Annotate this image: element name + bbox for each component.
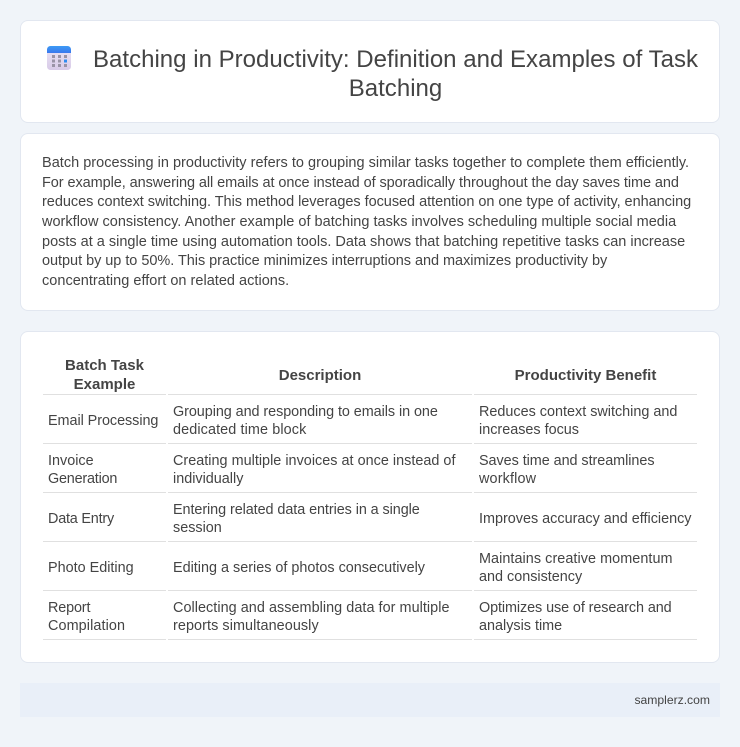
title: Batching: [349, 75, 442, 102]
footer bar: [20, 683, 720, 717]
row: email processing: increases focus: [479, 422, 579, 438]
row: report compilation: Optimizes use of research and: [479, 600, 672, 616]
title: Batching in Productivity: Definition and Examples of Task: [93, 46, 698, 73]
table header: Example: [74, 376, 135, 393]
intro text panel: [20, 133, 720, 311]
row: email processing: Grouping and responding to emails in one: [173, 404, 438, 420]
table header: Batch Task: [65, 357, 144, 374]
intro text panel: workflow consistency. Another example of batching tasks involves scheduling multiple social media: [42, 214, 676, 230]
row: email processing: Reduces context switching and: [479, 404, 677, 420]
icon: calendar: [47, 46, 71, 70]
row: photo editing: [48, 551, 673, 585]
row: report compilation: reports simultaneously: [173, 618, 319, 634]
row: data entry: Data Entry: [48, 511, 114, 527]
title: [93, 46, 698, 102]
row: invoice generation: Invoice: [48, 453, 94, 469]
row: report compilation: Report: [48, 600, 90, 616]
row: report compilation: [48, 600, 672, 634]
intro text panel: concentrating effort on related actions.: [42, 273, 289, 289]
row: photo editing: Editing a series of photos consecutively: [173, 560, 425, 576]
intro text panel: reduces context switching. This method leverages focused attention on one type of activity, enhancing: [42, 194, 691, 210]
row: invoice generation: individually: [173, 471, 243, 487]
row: data entry: session: [173, 520, 222, 536]
table panel: [20, 331, 720, 663]
row: email processing: [48, 404, 677, 438]
row: email processing: dedicated time block: [173, 422, 306, 438]
table header: [65, 357, 656, 393]
row: data entry: Improves accuracy and efficiency: [479, 511, 692, 527]
row: invoice generation: workflow: [479, 471, 536, 487]
row: invoice generation: [48, 453, 654, 487]
row: data entry: Entering related data entries in a single: [173, 502, 420, 518]
row: invoice generation: Saves time and streamlines: [479, 453, 654, 469]
intro text panel: output by up to 50%. This practice minimizes interruptions and maximizes productivity by: [42, 253, 607, 269]
row: invoice generation: Creating multiple invoices at once instead of: [173, 453, 455, 469]
footer source text: samplerz.com: [634, 693, 710, 707]
row: email processing: Email Processing: [48, 413, 158, 429]
row: data entry: [48, 502, 692, 536]
intro text panel: Batch processing in productivity refers to grouping similar tasks together to complete them efficiently.: [42, 155, 689, 171]
header panel: [20, 20, 720, 123]
table header: Productivity Benefit: [515, 367, 656, 384]
intro text panel: For example, answering all emails at once instead of sporadically throughout the day saves time and: [42, 175, 679, 191]
row: photo editing: Maintains creative momentum: [479, 551, 673, 567]
row: photo editing: Photo Editing: [48, 560, 134, 576]
intro text panel: posts at a single time using automation tools. Data shows that batching repetitive tasks can increase: [42, 234, 685, 250]
row: invoice generation: Generation: [48, 471, 117, 487]
row: report compilation: Compilation: [48, 618, 125, 634]
table header: Description: [279, 367, 361, 384]
row: report compilation: Collecting and assembling data for multiple: [173, 600, 450, 616]
row: photo editing: and consistency: [479, 569, 582, 585]
row: report compilation: analysis time: [479, 618, 562, 634]
